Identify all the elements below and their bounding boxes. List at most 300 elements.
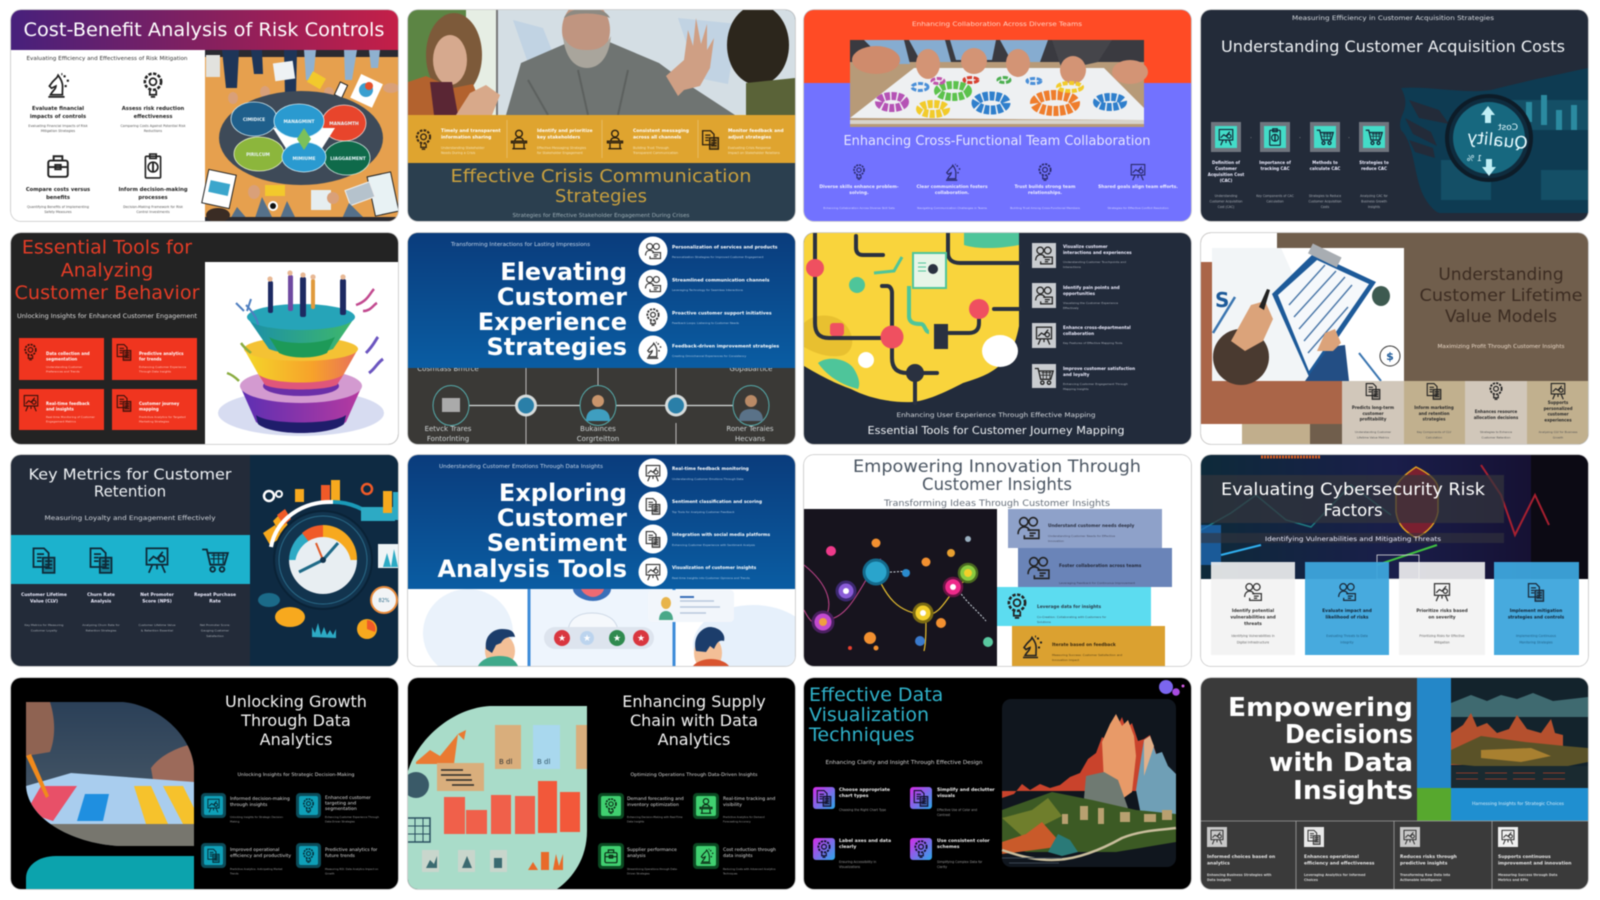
item: enhances efficiency: Leveraging Analytics for Informed (1304, 872, 1366, 876)
image: feedback illustration: ★ (557, 634, 566, 644)
item: personalization (638, 236, 777, 265)
column: resource allocation: Strategies to Enhance (1480, 430, 1512, 434)
strategy 1: Understanding Stakeholder (440, 146, 485, 150)
column: identify vulnerabilities: Identifying Vulnerabilities in (1231, 634, 1275, 638)
image: mint supply chain still life: B dl (536, 758, 550, 766)
metric: CLV: Customer Lifetime (21, 592, 66, 598)
item: continuous improvement: improvement and innovation (1498, 860, 1571, 866)
item: continuous improvement: Supports continuous (1498, 854, 1551, 860)
red card: data collection: Preferences and Trends (46, 369, 80, 373)
metric: NPS: Net Promoter (140, 592, 174, 598)
red card: data collection: segmentation (46, 356, 77, 361)
item: real-time tracking: Real-time tracking and (722, 796, 775, 802)
red card: journey mapping (112, 388, 196, 430)
item: operational efficiency: Trends (230, 871, 239, 875)
photo: team around table with venn diagram: CIMIDICE (242, 117, 265, 123)
title: with Data (1269, 748, 1413, 778)
strategy 2: Effective Messaging Strategies (536, 146, 586, 150)
column: resource allocation: Customer Retention (1482, 435, 1511, 439)
red card: data collection: Data collection and (46, 350, 89, 356)
photo: three people arguing (408, 1, 794, 115)
title: Customer Behavior (14, 282, 199, 304)
strategy 4 (702, 128, 783, 155)
column: resource allocation: Enhances resource (1475, 408, 1518, 414)
image: feedback illustration (422, 580, 812, 685)
item: informed decision making: through insights (230, 802, 267, 808)
column dividers (1201, 820, 1588, 888)
panel: customer journey mapping slide (804, 232, 1191, 444)
item: strategies (1359, 160, 1389, 209)
item: visualization: Visualization of customer insights (672, 565, 756, 571)
item: inform decision making (118, 154, 187, 214)
column: marketing strategies: and retention (1419, 410, 1450, 415)
item: visualize interactions (1032, 242, 1132, 268)
image: cost quality dial (1400, 68, 1588, 213)
box: iterate on feedback: Innovation Impact (1052, 658, 1080, 662)
metric: CLV: Key Metrics for Measuring (24, 623, 63, 627)
item: proactive support (638, 302, 771, 331)
item: demand forecasting: Enhancing Decision-Making with Real-Time (626, 814, 682, 818)
item: informed decision making: Unlocking Insights for Strategic Decision- (230, 814, 283, 818)
title: Understanding Customer Acquisition Costs (1221, 37, 1565, 56)
title: Sentiment (486, 529, 626, 557)
box: leverage data: Leverage data for insights (1037, 604, 1101, 610)
item: satisfaction: Enhancing Customer Engagement Through (1063, 382, 1128, 386)
item: definition of CAC: Customer Acquisition (1210, 200, 1243, 204)
item: strategies: Analyzing CAC for (1360, 194, 1389, 198)
item: label axes: Ensuring Accessibility in (839, 860, 876, 864)
item: cost reduction (692, 842, 776, 875)
item: feedback monitoring: Understanding Customer Emotions Through Data (672, 477, 743, 481)
subtitle: Harnessing Insights for Strategic Choices (1472, 800, 1565, 806)
item: pain points: Identify pain points and (1063, 284, 1120, 290)
metric: churn (82, 592, 120, 632)
photo: person reviewing clipboard: S (1215, 288, 1229, 312)
title: Analytics (259, 730, 332, 748)
item: chart types: chart types (839, 792, 869, 798)
image: data landscape (1451, 678, 1588, 788)
strategy 1: information sharing (440, 134, 491, 140)
panel: cybersecurity risk factors slide (1201, 455, 1588, 666)
item: streamlined communication: Streamlined communication channels (672, 277, 769, 283)
title: Elevating (500, 258, 626, 286)
item: shared goals: Shared goals align team efforts. (1098, 184, 1178, 190)
item: enhanced targeting: Data-Driven Strategies (324, 819, 355, 823)
red card: real-time feedback: Real-time Monitoring of Customer (46, 414, 95, 418)
item: simplify visuals (910, 786, 995, 816)
column: marketing strategies: Inform marketing (1414, 404, 1454, 410)
subtitle: Measuring Loyalty and Engagement Effectively (44, 515, 215, 522)
title: Decisions (1285, 720, 1413, 750)
metric: NPS: Score (NPS) (142, 598, 171, 604)
column: long-term profitability: profitability (1360, 416, 1387, 421)
decorative teal block (26, 856, 194, 888)
column: evaluate impact: Evaluating Threats to Data (1326, 634, 1368, 638)
item: continuous improvement: Measuring Success through Data (1498, 872, 1557, 876)
item: evaluate financial impacts (28, 74, 87, 133)
item: supplier performance: Driven Strategies (626, 871, 650, 875)
photo: team around table with venn diagram (201, 50, 398, 222)
item: enhanced targeting: targeting and (324, 800, 356, 806)
item: real-time tracking: Predictive Analytics for Demand (722, 814, 764, 818)
column: prioritize risks: on severity (1428, 615, 1456, 621)
image: mint supply chain still life (402, 706, 590, 888)
item: label axes: Label axes and data (839, 838, 891, 844)
metric: repeat purchase: Net Promoter Score: (199, 623, 230, 627)
item: compare costs (25, 156, 90, 214)
strategy 4: Monitor feedback and (728, 128, 783, 134)
title: Strategies (555, 186, 646, 207)
item: enhances efficiency (1304, 826, 1375, 882)
title: Factors (1323, 501, 1383, 520)
box: understand customer needs: Innovation (1048, 539, 1064, 543)
item: clear communication: collaboration. (935, 190, 969, 196)
photo: team around table with venn diagram: MANAGMINT (283, 119, 314, 125)
column: identify vulnerabilities: threats (1244, 621, 1262, 627)
title: Understanding (1438, 264, 1564, 284)
column: mitigation strategies: strategies and controls (1508, 615, 1565, 621)
item: pain points: Visualizing the Customer Experience (1063, 300, 1118, 304)
item: trust: Trust builds strong team (1015, 184, 1076, 190)
title: Insights (1293, 776, 1413, 806)
item: enhances efficiency: efficiency and effectiveness (1304, 860, 1375, 866)
item: chart types (813, 786, 890, 812)
item: evaluate financial impacts: Mitigation Strategies (40, 129, 75, 133)
band: four strategies (408, 115, 794, 163)
red card: real-time feedback: and insights (46, 406, 74, 411)
photo: team around table with venn diagram: PIRILCUM (246, 152, 269, 158)
item: strategies: Insights (1368, 205, 1380, 209)
item: classification: Sentiment classification and scoring (672, 499, 762, 505)
item: cross-departmental: Key Features of Effective Mapping Tools (1063, 340, 1123, 344)
title: Evaluating Cybersecurity Risk (1221, 480, 1485, 499)
item: pain points: opportunities (1063, 290, 1095, 296)
item: definition of CAC: Acquisition Cost (1208, 172, 1244, 177)
subtitle: Optimizing Operations Through Data-Driven Insights (630, 772, 758, 778)
column: resource allocation (1465, 380, 1527, 444)
icons row with labels: · (1250, 135, 1252, 142)
item: clear communication (916, 164, 988, 210)
title: Customer (496, 504, 627, 532)
image: feedback illustration: ★ (582, 634, 591, 644)
item: compare costs: benefits (46, 195, 69, 201)
item: feedback-driven: Creating Omnichannel Experiences for Consistency (672, 354, 746, 358)
metric: NPS: & Retention Essential (140, 628, 173, 632)
item: enhances efficiency: Choices (1304, 878, 1318, 882)
item: enhances efficiency: Enhances operational (1304, 854, 1359, 860)
image: network diagram photo: Eetvck Trares (424, 424, 471, 432)
strategy 2: Identify and prioritize (536, 128, 592, 134)
strategy 3 (607, 128, 688, 155)
item: consistent colors: Simplifying Complex Data for (937, 860, 983, 864)
column: marketing strategies: Key Components of CLV (1417, 430, 1451, 434)
item: assess risk reduction: Assess risk reduction (121, 106, 184, 112)
item: consistent colors: schemes (937, 844, 960, 850)
title: Value Models (1445, 306, 1557, 326)
strategy 1: Timely and transparent (440, 128, 501, 134)
item: satisfaction: Mapping Insights (1063, 386, 1089, 390)
item: feedback-driven: Feedback-driven improvement strategies (672, 343, 779, 349)
item: diverse skills (819, 165, 899, 210)
item: label axes (813, 838, 891, 868)
red card: predictive analytics: Predictive analytics (138, 350, 184, 356)
metric: repeat purchase: Rate (209, 598, 220, 604)
column: evaluate impact: Evaluate impact and (1322, 608, 1372, 614)
red card: journey mapping: mapping (138, 406, 158, 411)
strategy 3: Consistent messaging (632, 128, 688, 134)
item: simplify visuals: Effective Use of Color and (937, 808, 977, 812)
image: cyber dashboard photo (1201, 455, 1588, 579)
item: continuous improvement (1498, 826, 1571, 882)
item: streamlined communication: Leveraging Technology for Seamless Interactions (672, 288, 743, 292)
metric: repeat purchase (194, 592, 235, 638)
red card: predictive analytics: Enhancing Customer Experience (138, 364, 186, 368)
item: enhanced targeting: segmentation (324, 806, 356, 812)
title: Key Metrics for Customer (28, 466, 232, 484)
item: chart types: Choose appropriate (839, 786, 890, 792)
title: Customer Insights (922, 475, 1072, 494)
red card: journey mapping: Predictive Analytics for Targeted (138, 414, 185, 418)
box: leverage data (997, 587, 1151, 626)
item: trust: relationships. (1028, 190, 1062, 196)
item: cost reduction: Cost reduction through (722, 846, 776, 852)
subtitle: Enhancing Clarity and Insight Through Effective Design (826, 760, 982, 766)
item: simplify visuals: Contrast (937, 812, 951, 816)
title: Analytics (657, 730, 730, 748)
column: personalized experiences: Supports (1548, 400, 1569, 404)
title: Analysis Tools (437, 555, 626, 583)
item: visualize interactions: Interactions (1063, 264, 1081, 268)
panel: growth through data analytics slide (10, 678, 398, 888)
subtitle: Maximizing Profit Through Customer Insights (1438, 344, 1565, 350)
item: predictive analytics: Growth (324, 871, 334, 875)
item: inform decision making: Decision-Making Framework for Risk (123, 205, 183, 209)
item: visualization: Real-time Insights into Customer Opinions and Trends (672, 576, 750, 580)
title: Exploring (498, 479, 626, 507)
panel: data visualization techniques slide (804, 678, 1191, 888)
item: evaluate financial impacts: Evaluating Financial Impacts of Risk (28, 124, 87, 128)
image: layered funnel with people (204, 262, 398, 444)
item: satisfaction (1032, 364, 1135, 390)
item: social integration: Enhancing Customer Experience with Sentiment Analysis (672, 543, 755, 547)
item: methods: Methods to (1312, 160, 1338, 165)
red card: predictive analytics: Through Data Insights (138, 369, 171, 373)
box: understand customer needs: Understanding Customer Needs for Effective (1048, 534, 1115, 538)
item: importance: tracking CAC (1260, 166, 1290, 171)
subtitle: Measuring Efficiency in Customer Acquisition Strategies (1292, 15, 1494, 22)
box: leverage data: Solutions (1037, 620, 1051, 624)
item: feedback-driven (638, 335, 779, 364)
strategy 2: for Stakeholder Engagement (536, 151, 583, 155)
column: evaluate impact (1305, 562, 1389, 655)
title: Effective Data (809, 684, 943, 706)
column: evaluate impact: Integrity (1340, 640, 1354, 644)
strategy 3: Building Trust Through (632, 146, 668, 150)
subtitle: Transforming Ideas Through Customer Insights (883, 499, 1110, 509)
title: Experience (477, 308, 626, 336)
title: Empowering (1228, 692, 1413, 722)
red card: real-time feedback (18, 388, 104, 430)
item: visualize interactions: Understanding Customer Touchpoints and (1063, 260, 1126, 264)
column: evaluate impact: likelihood of risks (1326, 615, 1369, 621)
image: 3D data landscape (1002, 698, 1176, 866)
metric: repeat purchase: Satisfaction (206, 634, 223, 638)
box: iterate on feedback: Measuring Success: Customer Satisfaction and (1052, 653, 1122, 657)
photo: team around table with venn diagram: MIMIUME (292, 156, 315, 162)
item: visualize interactions: Visualize customer (1063, 244, 1109, 248)
column: identify vulnerabilities: Digital Infrastructure (1237, 640, 1269, 644)
panel: crisis communication slide (408, 10, 794, 221)
item: reduces risks: Actionable Intelligence (1400, 878, 1441, 882)
item: cost reduction: Techniques (722, 871, 738, 875)
column: marketing strategies: Calculation (1426, 435, 1442, 439)
title: Essential Tools for (21, 236, 192, 258)
item: evaluate financial impacts: Evaluate financial (31, 106, 84, 112)
item: methods: calculate CAC (1310, 166, 1340, 171)
panel: customer experience strategies slide (408, 232, 794, 444)
item: informed decision making: Informed decision-making (230, 796, 289, 802)
item: enhanced targeting: Enhanced customer (324, 794, 370, 800)
item: informed choices (1207, 826, 1275, 882)
item: operational efficiency: Improved operational (230, 846, 279, 852)
column: marketing strategies (1404, 380, 1465, 444)
title: Techniques (808, 724, 915, 746)
item: definition of CAC: Understanding (1215, 194, 1237, 198)
metric: CLV: Customer Loyalty (30, 628, 57, 632)
item: assess risk reduction: Reductions (143, 129, 162, 133)
strategy 2 (511, 128, 592, 155)
column: mitigation strategies: Implement mitigation (1510, 608, 1562, 614)
item: operational efficiency: efficiency and productivity (230, 852, 291, 858)
column: mitigation strategies: Implementing Continuous (1516, 634, 1556, 638)
item: informed choices: analytics (1207, 860, 1230, 866)
item: informed choices: Informed choices based on (1207, 854, 1275, 860)
item: cross-departmental (1032, 322, 1131, 348)
item: pain points (1032, 282, 1120, 310)
item: reduces risks: Reduces risks through (1400, 854, 1457, 860)
item: predictive analytics: Measuring ROI: Data Analytics Impact on (324, 866, 378, 870)
box: iterate on feedback (1012, 626, 1165, 666)
item: demand forecasting: Demand forecasting and (626, 796, 683, 802)
subtitle: Identifying Vulnerabilities and Mitigating Threats (1265, 536, 1441, 543)
item: importance: Importance of (1259, 160, 1291, 165)
image: cost quality dial: Quality (1466, 128, 1529, 154)
item: feedback monitoring (638, 458, 748, 488)
icons row with labels: · (1348, 135, 1350, 142)
item: clear communication: Navigating Communication Challenges in Teams (917, 206, 987, 210)
strategy 4: Impact on Stakeholder Relations (728, 151, 780, 155)
item: clear communication: Clear communication fosters (916, 184, 988, 190)
red card: predictive analytics (112, 338, 196, 380)
item: simplify visuals: Simplify and declutter (937, 786, 995, 792)
column: mitigation strategies: Monitoring Strategies (1519, 640, 1553, 644)
title: Through Data (240, 710, 350, 730)
column: personalized experiences: Growth (1553, 435, 1563, 439)
image: network diagram photo: Roner Teraies (726, 424, 773, 432)
item: compare costs: Safety Measures (44, 210, 71, 214)
item: social integration (638, 524, 770, 554)
column: personalized experiences: Analyzing CLV for Business (1539, 430, 1578, 434)
item: demand forecasting: inventory optimization (626, 802, 678, 808)
box: foster collaboration: Foster collaboration across teams (1059, 563, 1142, 569)
item: informed decision making: Making (230, 819, 239, 823)
image: network diagram photo (417, 364, 773, 444)
image: network diagram photo: Cosmtass Bmtrce (417, 364, 478, 372)
column: long-term profitability: Understanding Customer (1355, 430, 1392, 434)
image: analytics gauge dashboard: 82% (378, 598, 389, 604)
box: iterate on feedback: Iterate based on feedback (1052, 642, 1116, 648)
item: informed choices: Enhancing Business Strategies with (1207, 872, 1272, 876)
title: Unlocking Growth (225, 692, 366, 710)
item: supplier performance: Streamlining Operations through Data- (626, 866, 677, 870)
item: methods: Customer Acquisition (1309, 200, 1342, 204)
item: definition of CAC: Customer (1215, 166, 1237, 171)
metric: churn: Retention Strategies (85, 628, 116, 632)
photo: team around table with venn diagram: MANAGMTH (329, 121, 359, 127)
item: methods: Costs (1321, 205, 1330, 209)
item: reduces risks: predictive insights (1400, 860, 1448, 866)
item: definition of CAC: Cost (CAC) (1218, 205, 1234, 209)
column: long-term profitability: Lifetime Value Metrics (1357, 435, 1389, 439)
item: definition of CAC: (CAC) (1220, 178, 1232, 183)
panel: customer acquisition costs slide (1201, 10, 1588, 221)
metric: NPS (138, 592, 175, 632)
item: diverse skills: solving. (849, 190, 869, 196)
item: informed choices: Data Insights (1207, 878, 1231, 882)
metric: NPS: Customer Lifetime Value (138, 623, 175, 627)
strategy 1: Needs During a Crisis (440, 151, 475, 155)
image: network diagram photo: Bukaınces (580, 424, 616, 432)
item: inform decision making: Control Investments (136, 210, 169, 214)
item: consistent colors: Clarity (937, 864, 947, 868)
strategy 3: across all channels (632, 134, 681, 140)
item: streamlined communication (638, 269, 769, 298)
panel: customer sentiment analysis slide (408, 455, 794, 666)
photo: chart with pen (26, 702, 194, 846)
item: importance: Calculation (1266, 200, 1284, 204)
item: trust: Building Trust Among Cross-Functional Members (1010, 206, 1080, 210)
item: assess risk reduction (120, 74, 185, 133)
column: identify vulnerabilities: vulnerabilities and (1230, 615, 1276, 621)
red card: predictive analytics: for trends (138, 356, 162, 361)
item: strategies: reduce CAC (1361, 166, 1387, 171)
item: inform decision making: processes (138, 195, 167, 201)
item: enhanced targeting: Enhancing Customer Experience Through (324, 814, 379, 818)
item: demand forecasting (598, 792, 683, 823)
item: consistent colors (910, 838, 990, 868)
column: personalized experiences: customer (1547, 411, 1569, 416)
panel: customer lifetime value slide (1201, 232, 1588, 444)
item: personalization: Personalization Strategies for Improved Customer Engagement (672, 254, 764, 258)
image: network diagram photo: Hecvans (735, 434, 765, 442)
subtitle: Unlocking Insights for Enhanced Customer Engagement (16, 312, 197, 320)
item: consistent colors: Use consistent color (937, 838, 990, 844)
item: classification (638, 492, 762, 520)
title: Customer (496, 282, 627, 310)
title: Visualization (809, 704, 929, 726)
item: chart types: Choosing the Right Chart Type (839, 808, 886, 812)
item: importance (1256, 160, 1294, 204)
item: cross-departmental: collaboration (1063, 330, 1094, 336)
item: enhanced targeting (296, 792, 379, 823)
column: prioritize risks: Prioritizing Risks for Effective (1419, 634, 1465, 638)
column: personalized experiences: personalized (1544, 405, 1573, 410)
item: supplier performance: Supplier performance (626, 846, 676, 852)
teal icon band (10, 535, 250, 584)
box: understand customer needs: Understand customer needs deeply (1048, 523, 1134, 529)
box: foster collaboration: Leveraging Feedback for Continuous Improvement (1059, 581, 1136, 585)
column: prioritize risks: Mitigation (1434, 640, 1450, 644)
